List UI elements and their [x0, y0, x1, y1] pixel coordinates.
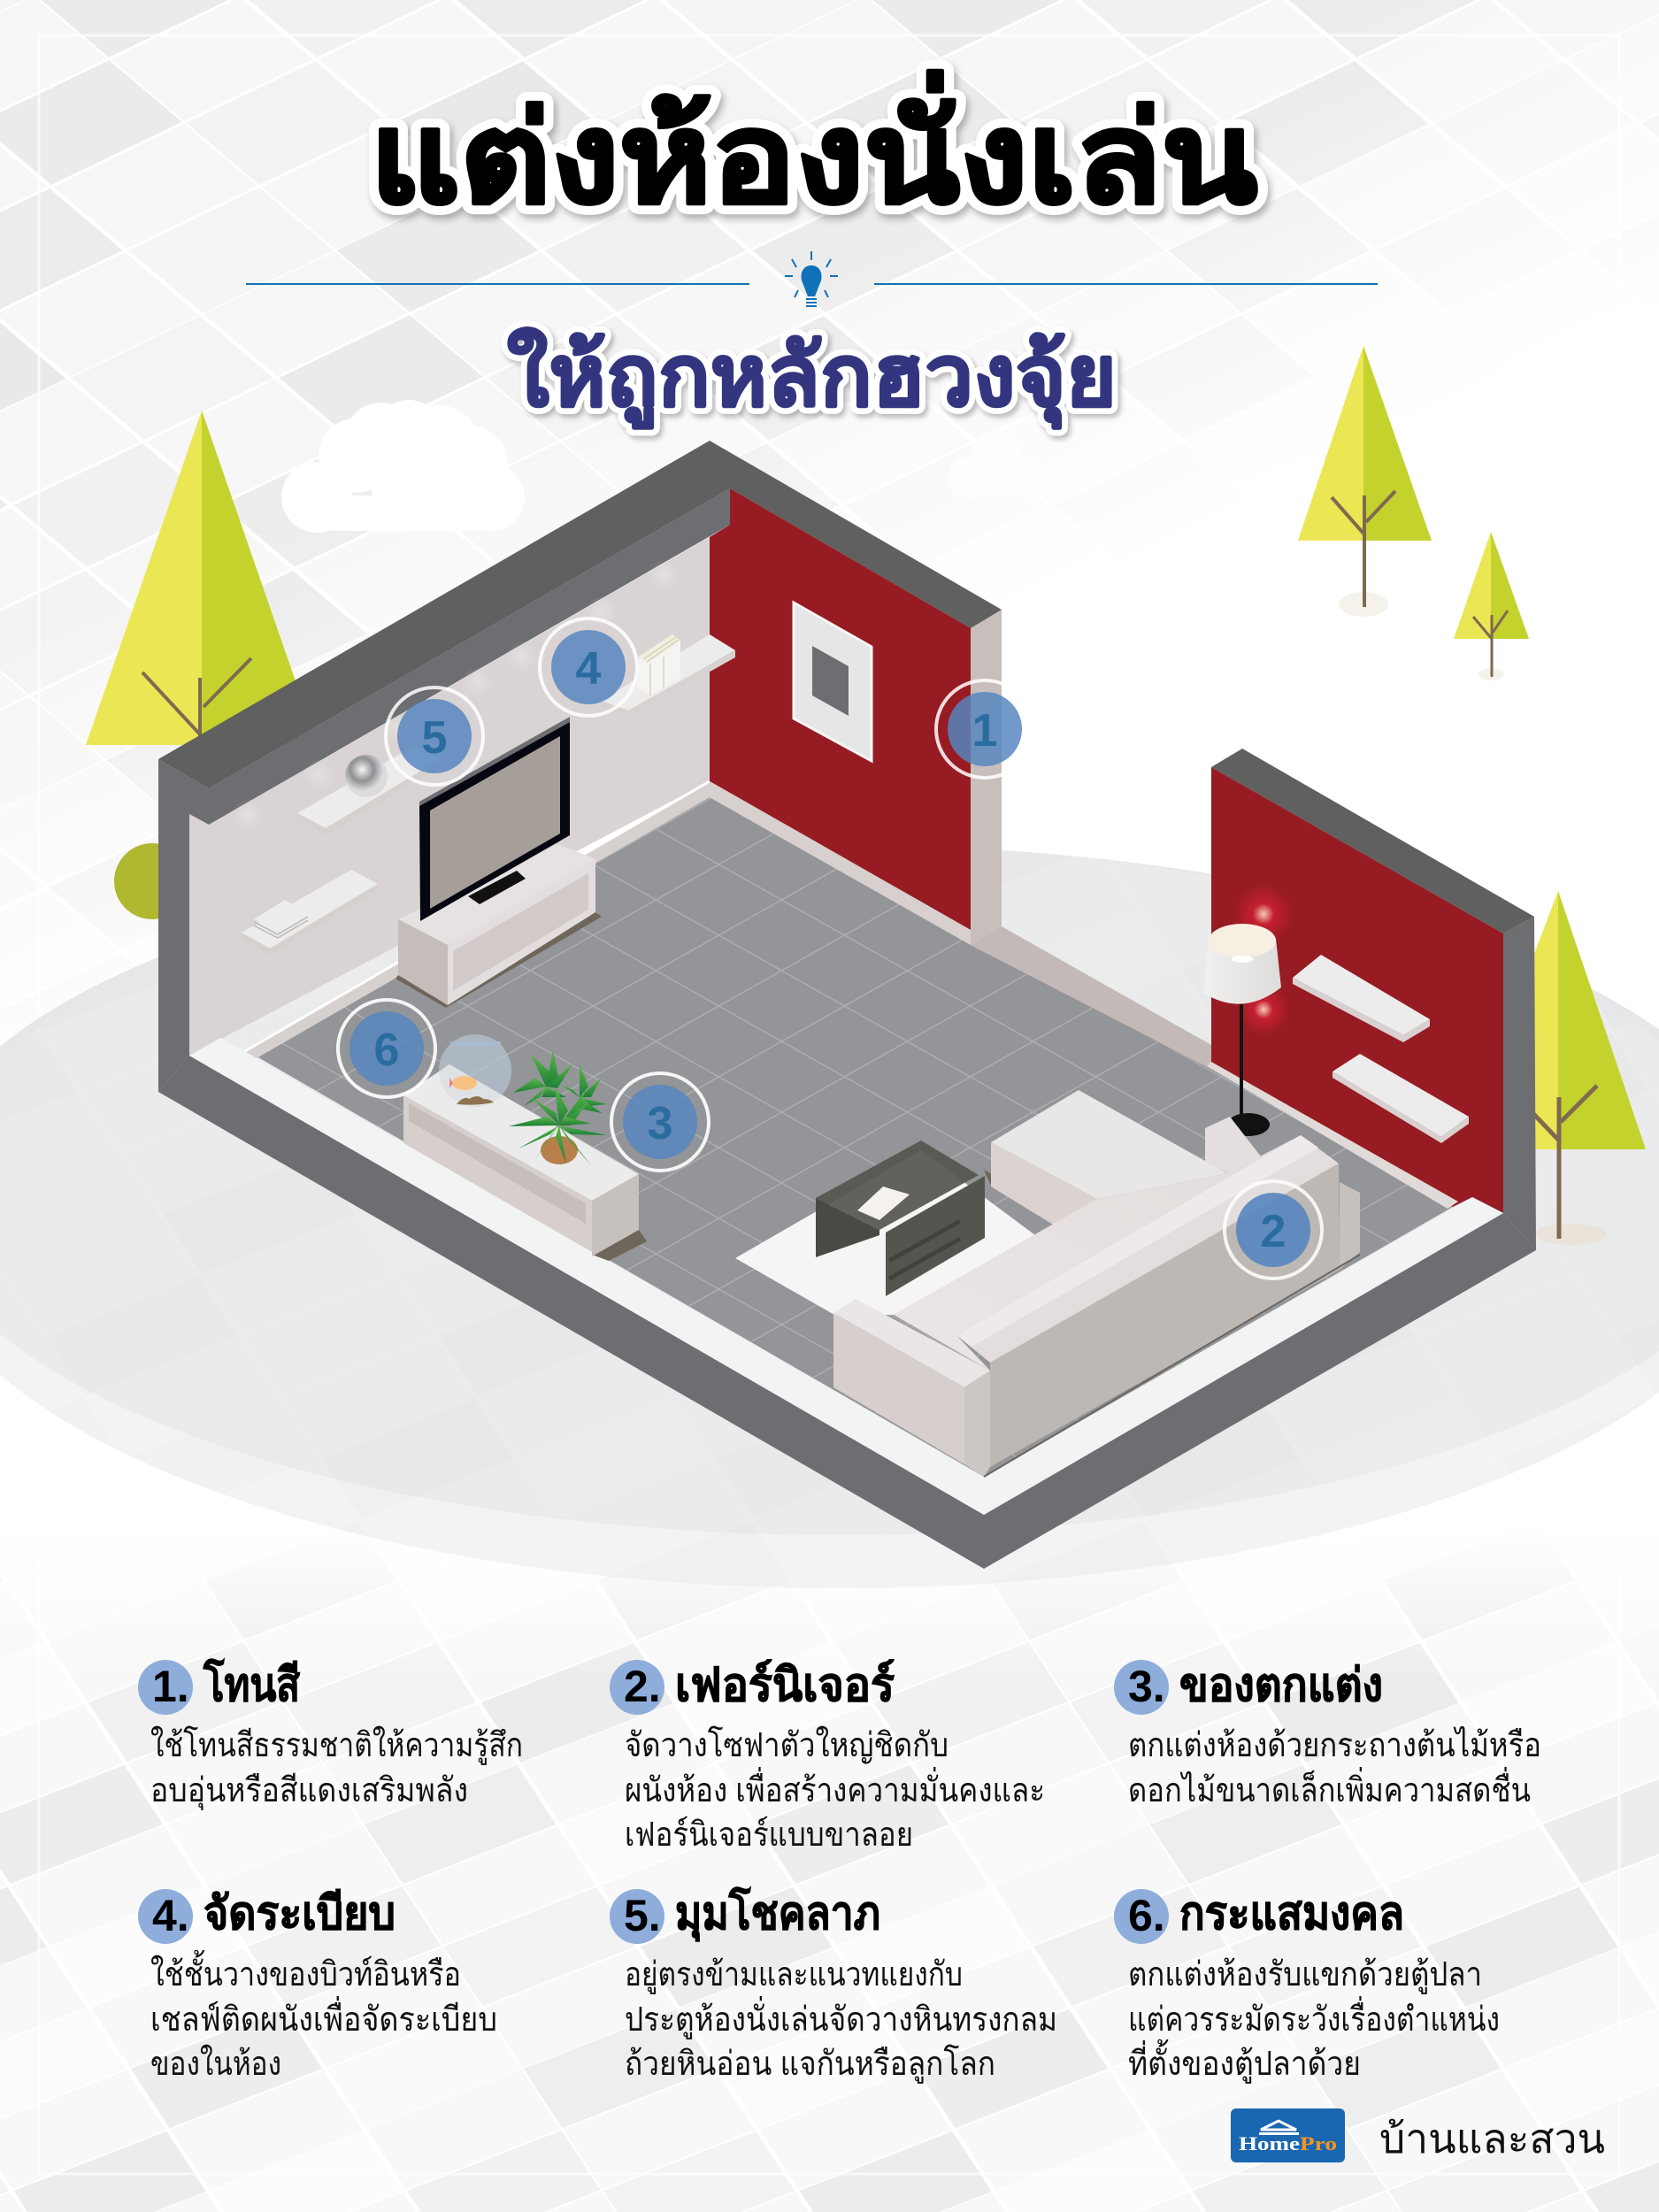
item 2: เฟอร์นิเจอร์: เฟอร์นิเจอร์ — [675, 1659, 895, 1711]
sofa big face — [990, 1164, 1340, 1467]
item 1: โทนสี: 1. — [152, 1662, 189, 1711]
item 5: มุมโชคลาภ: อยู่ตรงข้ามและแนวทแยงกับ — [625, 1956, 963, 1994]
sofa — [833, 1090, 1360, 1477]
number marker 4 — [540, 618, 637, 716]
item 1: โทนสี — [138, 1657, 523, 1810]
floor lamp — [1203, 924, 1281, 1136]
item 2: เฟอร์นิเจอร์: เฟอร์นิเจอร์แบบขาลอย — [625, 1816, 913, 1854]
divider with light bulb icon — [246, 251, 1378, 307]
item 2: เฟอร์นิเจอร์: 2. — [624, 1662, 661, 1711]
television — [419, 717, 570, 921]
left wall baseboard — [245, 781, 710, 1058]
right wall baseboard — [1207, 1062, 1458, 1209]
room shell — [158, 441, 1536, 1569]
number marker 3: 3 — [648, 1098, 672, 1149]
tree: top right small — [1454, 532, 1529, 680]
sofa far armrest — [1205, 1117, 1261, 1174]
tree: right — [1460, 891, 1646, 1245]
item 5: มุมโชคลาภ: มุมโชคลาภ — [675, 1886, 880, 1942]
right wall outer face — [1503, 917, 1536, 1250]
sofa seat — [894, 1135, 1301, 1371]
coffee table — [816, 1141, 985, 1296]
item 4: จัดระเบียบ: 4. — [152, 1891, 189, 1940]
item 6: กระแสมงคล: กระแสมงคล — [1179, 1888, 1404, 1939]
title: แต่งห้องนั่งเล่น — [370, 70, 1257, 229]
left outer face — [158, 759, 209, 1092]
item 5: มุมโชคลาภ: ถ้วยหินอ่อน แจกันหรือลูกโลก — [625, 2044, 995, 2084]
sofa base shadow — [984, 1255, 1360, 1477]
tree: left large — [86, 411, 318, 752]
item 3: ของตกแต่ง: ตกแต่งห้องด้วยกระถางต้นไม้หรือ — [1128, 1726, 1541, 1764]
logo: HomePro — [1231, 2108, 1345, 2162]
console cabinet — [403, 1064, 647, 1261]
sofa near armrest — [833, 1299, 990, 1477]
number marker 2 — [1225, 1181, 1322, 1279]
fish bowl — [403, 1034, 513, 1128]
green bush left — [114, 843, 190, 919]
item 6: กระแสมงคล: แต่ควรระมัดระวังเรื่องตำแหน่ง — [1128, 1996, 1500, 2039]
cloud right faint — [948, 431, 1048, 499]
right wall top — [1211, 749, 1534, 933]
front base — [158, 1056, 1536, 1569]
background ground ellipse — [0, 845, 1659, 1588]
item 2: เฟอร์นิเจอร์ — [610, 1659, 1045, 1854]
left wall — [189, 537, 710, 1056]
tree: top right large — [1298, 346, 1432, 617]
right red wall — [1211, 767, 1503, 1213]
pillar — [971, 610, 1002, 945]
item 5: มุมโชคลาภ: 5. — [624, 1891, 661, 1940]
number marker 1: 1 — [972, 705, 997, 757]
number marker 2: 2 — [1261, 1206, 1286, 1257]
item 6: กระแสมงคล: 6. — [1128, 1891, 1165, 1940]
cloud left — [281, 400, 525, 533]
number marker 4: 4 — [576, 643, 602, 695]
sofa end piece — [1340, 1182, 1360, 1270]
item 5: มุมโชคลาภ: ประตูห้องนั่งเล่นจัดวางหินทรงกลม — [625, 1996, 1057, 2039]
number marker 1 — [936, 680, 1033, 778]
item 2: เฟอร์นิเจอร์: จัดวางโซฟาตัวใหญ่ชิดกับ — [625, 1725, 949, 1764]
item 1: โทนสี: ใช้โทนสีธรรมชาติให้ความรู้สึก — [150, 1725, 523, 1765]
item 3: ของตกแต่ง — [1114, 1660, 1541, 1809]
item 3: ของตกแต่ง: ดอกไม้ขนาดเล็กเพิ่มความสดชื่น — [1128, 1767, 1531, 1809]
item 2: เฟอร์นิเจอร์: ผนังห้อง เพื่อสร้างความมั่นคงและ — [625, 1767, 1045, 1809]
sofa back — [956, 1135, 1339, 1363]
silver ball — [345, 755, 388, 797]
wall spot lights — [232, 559, 680, 831]
title: แต่งห้องนั่งเล่น — [370, 70, 1257, 229]
roof top — [158, 441, 1002, 788]
subtitle: ให้ถูกหลักฮวงจุ้ย — [507, 327, 1117, 429]
picture frame — [794, 603, 872, 761]
number marker 6 — [338, 1000, 435, 1097]
floor — [258, 797, 1453, 1477]
item 6: กระแสมงคล: ที่ตั้งของตู้ปลาด้วย — [1128, 2039, 1361, 2084]
item 6: กระแสมงคล — [1114, 1888, 1500, 2084]
number marker 6: 6 — [374, 1025, 399, 1076]
item 1: โทนสี: อบอุ่นหรือสีแดงเสริมพลัง — [150, 1772, 468, 1810]
subtitle: ให้ถูกหลักฮวงจุ้ย — [507, 327, 1117, 429]
item 3: ของตกแต่ง: 3. — [1128, 1662, 1165, 1711]
number marker 5 — [386, 687, 483, 785]
tv stand — [396, 844, 602, 1008]
item 4: จัดระเบียบ: ใช้ชั้นวางของบิวท์อินหรือ — [150, 1949, 461, 1993]
item 3: ของตกแต่ง: ของตกแต่ง — [1179, 1660, 1383, 1711]
number marker 5: 5 — [422, 712, 447, 764]
item 4: จัดระเบียบ — [138, 1888, 497, 2083]
item 1: โทนสี: โทนสี — [203, 1657, 300, 1711]
soffit band — [209, 488, 730, 825]
lamp glow — [1233, 884, 1294, 1036]
potted plant — [509, 1050, 607, 1165]
brand text: บ้านและสวน — [1379, 2116, 1605, 2162]
shelf with silver ball — [297, 745, 441, 835]
item 4: จัดระเบียบ: ของในห้อง — [150, 2045, 281, 2083]
floor rug — [735, 1150, 1035, 1315]
item 4: จัดระเบียบ: จัดระเบียบ — [204, 1888, 396, 1939]
front white strip — [189, 1038, 1503, 1515]
red back wall — [710, 488, 971, 930]
red wall baseboard — [710, 781, 971, 945]
item 5: มุมโชคลาภ — [610, 1886, 1057, 2084]
low wall — [971, 926, 1211, 1069]
number marker 3 — [611, 1073, 709, 1171]
lower wall shelf — [242, 870, 378, 956]
item 4: จัดระเบียบ: เชลฟ์ติดผนังเพื่อจัดระเบียบ — [150, 1996, 497, 2039]
right wall shelves — [1293, 955, 1469, 1143]
item 6: กระแสมงคล: ตกแต่งห้องรับแขกด้วยตู้ปลา — [1128, 1956, 1482, 1994]
wall shelf with books — [601, 634, 735, 718]
sofa chaise — [984, 1090, 1227, 1227]
logo: HomePro: Pro — [1300, 2132, 1337, 2154]
logo: HomePro: Home — [1239, 2132, 1300, 2154]
